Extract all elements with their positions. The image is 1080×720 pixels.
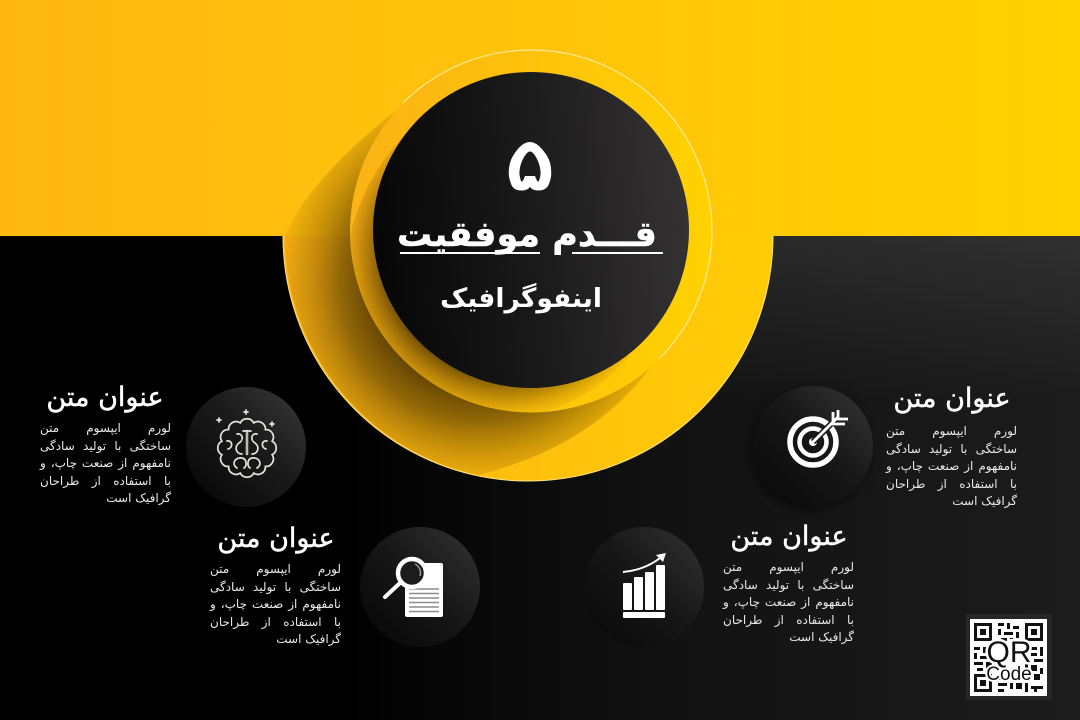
- body text: با استفاده از طراحان: [210, 614, 341, 628]
- icon: bar chart with arrow: [604, 527, 704, 618]
- body text: گرافیک است: [952, 494, 1017, 508]
- dark central circle: [373, 72, 689, 388]
- heading underline left: [400, 252, 540, 254]
- body text: با استفاده از طراحان: [723, 612, 854, 626]
- heading: عنوان متن: [893, 383, 1011, 414]
- heading: عنوان متن: [730, 521, 848, 552]
- body text: ساختگی با تولید سادگی: [40, 438, 171, 452]
- body text: گرافیک است: [276, 632, 341, 646]
- panel: growth chart (bottom centre-right): [604, 521, 854, 644]
- shadow of dark circle: [350, 135, 630, 413]
- body text: ساختگی با تولید سادگی: [210, 580, 341, 594]
- body text: گرافیک است: [106, 491, 171, 505]
- body text: لورم ایپسوم متن: [723, 560, 854, 574]
- long shadow of ring: [285, 105, 650, 475]
- icon: brain: [186, 387, 306, 507]
- black bottom background: [0, 236, 1080, 720]
- body text: لورم ایپسوم متن: [886, 424, 1017, 438]
- QR code: [966, 614, 1052, 700]
- QR code: QR: [986, 636, 1032, 669]
- panel: brain (left): [40, 382, 306, 507]
- QR code: Code: [986, 664, 1032, 685]
- body text: ساختگی با تولید سادگی: [723, 578, 854, 592]
- body text: [210, 562, 341, 646]
- panel: document search (bottom centre-left): [210, 523, 480, 647]
- yellow ring circle: [350, 50, 712, 412]
- ring outline: [403, 50, 712, 359]
- heading: عنوان متن: [217, 523, 335, 554]
- body text: با استفاده از طراحان: [886, 476, 1017, 490]
- body text: لورم ایپسوم متن: [210, 562, 341, 576]
- heading: five steps to success: قـــدم موفقیت: [397, 215, 657, 255]
- body text: نامفهوم از صنعت چاپ، و: [210, 597, 341, 611]
- subtitle: infographic: اینفوگرافیک: [440, 283, 602, 314]
- body text: نامفهوم از صنعت چاپ، و: [40, 456, 171, 470]
- yellow top background: [0, 0, 1080, 236]
- body text: گرافیک است: [789, 630, 854, 644]
- central title block: [397, 122, 663, 314]
- body text: ساختگی با تولید سادگی: [886, 442, 1017, 456]
- heading underline right: [572, 252, 663, 254]
- heading: عنوان متن: [46, 382, 164, 413]
- body text: نامفهوم از صنعت چاپ، و: [723, 595, 854, 609]
- body text: لورم ایپسوم متن: [40, 421, 171, 435]
- large yellow half circle: [282, 236, 774, 482]
- body text: نامفهوم از صنعت چاپ، و: [886, 459, 1017, 473]
- panel: target (top right): [754, 383, 1017, 508]
- soft top highlight of black background: [700, 236, 1080, 406]
- icon: magnifier over document: [360, 527, 480, 647]
- body text: [722, 560, 854, 644]
- body text: [886, 424, 1017, 508]
- number five: ۵: [505, 122, 555, 206]
- body text: [40, 421, 171, 505]
- icon: target with arrow: [754, 386, 873, 507]
- body text: با استفاده از طراحان: [40, 474, 171, 488]
